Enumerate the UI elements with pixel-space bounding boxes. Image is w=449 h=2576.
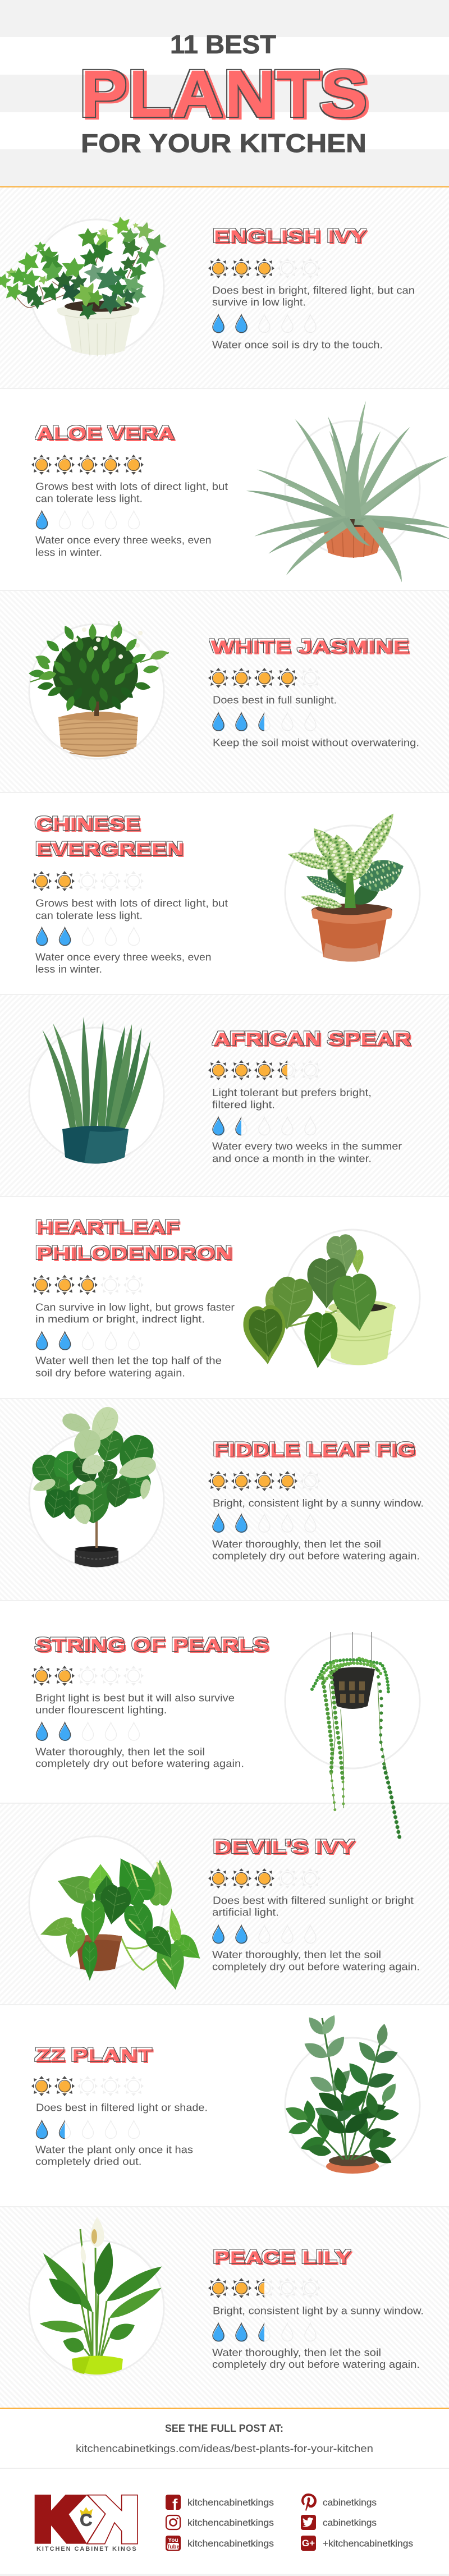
light text: Grows best with lots of direct light, but [35, 898, 228, 909]
panel: fiddle leaf fig [0, 1398, 449, 1600]
water text: Water once soil is dry to the touch. [212, 339, 383, 350]
water rating [213, 1925, 316, 1944]
plant circle [29, 2240, 164, 2375]
title: plants: PLANTS [79, 57, 367, 131]
orange divider [0, 186, 449, 187]
row background [0, 187, 449, 388]
icon: facebook: f [172, 2496, 178, 2513]
plant: white jasmine in wicker basket [29, 621, 169, 757]
water rating [213, 1117, 316, 1136]
footer [0, 2423, 449, 2576]
row background [0, 995, 449, 1196]
sun rating [208, 1868, 320, 1889]
light text line 2: in medium or bright, indrect light. [35, 1313, 205, 1324]
water rating [213, 1514, 316, 1533]
name: PEACE LILY [213, 2247, 350, 2267]
light text: Bright, consistent light by a sunny window. [213, 2305, 424, 2317]
water text: Water thoroughly, then let the soil [35, 1747, 205, 1758]
divider [0, 1803, 449, 1804]
plant circle [285, 421, 420, 556]
divider [0, 994, 449, 995]
divider [0, 590, 449, 591]
panel: zz plant [0, 2004, 449, 2174]
plant circle [29, 1836, 164, 1971]
icon: twitter [301, 2515, 316, 2530]
plant circle [285, 826, 420, 960]
sun rating [31, 1275, 144, 1295]
name: WHITE JASMINE [210, 636, 409, 656]
instagram handle: kitchencabinetkings [187, 2518, 274, 2528]
divider [0, 2206, 449, 2207]
water rating [213, 713, 316, 731]
name: FIDDLE LEAF FIG [213, 1439, 415, 1459]
plant circle [29, 1028, 164, 1162]
water rating [36, 927, 139, 946]
light text: Light tolerant but prefers bright, [212, 1087, 372, 1098]
panel: aloe vera [0, 388, 449, 583]
name line 1: CHINESE [35, 813, 140, 833]
water text: Water every two weeks in the summer [212, 1140, 402, 1152]
light text: Does best in filtered light or shade. [36, 2102, 208, 2114]
header stripes [0, 0, 449, 186]
plant: peace lily in lime bowl [38, 2217, 166, 2375]
plant circle [29, 624, 164, 759]
sun rating [208, 1471, 320, 1491]
panel: heartleaf philodendron [0, 1196, 449, 1378]
name [35, 813, 183, 859]
icon: youtube [166, 2536, 181, 2551]
plant: chinese evergreen in clay pot [286, 809, 409, 962]
name: ALOE VERA [35, 423, 174, 443]
light text line 2: can tolerate less light. [35, 910, 143, 922]
plant: african spear in teal pot [43, 1017, 150, 1164]
name line 2: PHILODENDRON [35, 1243, 232, 1263]
water text: Water once every three weeks, even [35, 952, 211, 963]
water text line 2: less in winter. [35, 964, 102, 975]
name: STRING OF PEARLS [35, 1634, 268, 1654]
logo: kitchen cabinet kings [35, 2495, 138, 2552]
icon: google plus: G+ [302, 2538, 315, 2549]
icon: google plus [301, 2536, 316, 2551]
name line 2: EVERGREEN [35, 838, 183, 859]
water text: Water well then let the top half of the [35, 1355, 222, 1366]
panel: peace lily [0, 2206, 449, 2408]
logo: kitchen cabinet kings: KITCHEN CABINET KINGS [36, 2546, 136, 2552]
title: 11 best: 11 BEST [170, 30, 276, 59]
bottom strip [0, 2574, 449, 2576]
water rating [36, 1332, 139, 1350]
water text line 2: completely dried out. [35, 2156, 141, 2167]
divider [0, 1600, 449, 1601]
plant circle [285, 1230, 420, 1364]
water text: Water once every three weeks, even [35, 534, 211, 546]
panel: english ivy [0, 187, 449, 388]
row background [0, 2207, 449, 2408]
water rating [36, 511, 139, 530]
sun rating [208, 2278, 320, 2298]
water text line 2: less in winter. [35, 547, 102, 558]
light text: Does best in bright, filtered light, but can [212, 285, 415, 296]
youtube handle: kitchencabinetkings [187, 2538, 274, 2549]
sun rating [31, 2076, 144, 2096]
divider [0, 2468, 449, 2469]
row background [0, 1399, 449, 1600]
water rating [213, 2323, 316, 2341]
facebook handle: kitchencabinetkings [187, 2497, 274, 2508]
plant circle [29, 1432, 164, 1567]
sun rating [31, 871, 144, 891]
divider [0, 1196, 449, 1197]
icon: youtube: Tube [167, 2544, 180, 2550]
panel: devil's ivy [0, 1803, 449, 2004]
divider [0, 388, 449, 389]
light text line 2: can tolerate less light. [35, 493, 143, 504]
name: DEVIL’S IVY [213, 1836, 355, 1857]
divider [0, 792, 449, 793]
water text line 2: soil dry before watering again. [35, 1367, 185, 1378]
plant: string of pearls in hanging basket [312, 1632, 400, 1838]
water text line 2: completely dry out before watering again. [35, 1758, 244, 1769]
water text: Water the plant only once it has [35, 2144, 193, 2155]
panel: african spear [0, 994, 449, 1196]
water text line 2: completely dry out before watering again. [212, 2359, 420, 2370]
divider [0, 1398, 449, 1399]
plant circle [29, 219, 164, 354]
water text line 2: completely dry out before watering again. [212, 1961, 420, 1972]
plant: aloe vera in terracotta pot [246, 400, 449, 583]
water text: Water thoroughly, then let the soil [212, 1539, 381, 1550]
pinterest handle: cabinetkings [323, 2497, 377, 2508]
light text line 2: under flourescent lighting. [35, 1704, 167, 1716]
url: kitchencabinetkings.com/ideas/best-plants-for-your-kitchen [76, 2443, 373, 2454]
light text: Bright light is best but it will also survive [35, 1693, 235, 1704]
panel: chinese evergreen [0, 792, 449, 975]
row background [0, 591, 449, 792]
row background [0, 1804, 449, 2004]
name [35, 1217, 232, 1263]
orange divider [0, 2408, 449, 2409]
light text line 2: survive in low light. [212, 296, 306, 308]
light text: Grows best with lots of direct light, but [35, 481, 228, 492]
plant: devil's ivy in brown pot [38, 1850, 207, 1992]
name: ZZ PLANT [35, 2045, 152, 2065]
panel: string of pearls [0, 1600, 449, 1838]
logo: kitchen cabinet kings: C [80, 2511, 92, 2530]
water rating [36, 1722, 139, 1741]
light text line 2: artificial light. [212, 1907, 279, 1918]
icon: pinterest [301, 2494, 317, 2511]
icon: facebook [166, 2495, 181, 2513]
light text: Can survive in low light, but grows faster [35, 1302, 235, 1313]
icon: youtube: You [168, 2537, 178, 2543]
name: ENGLISH IVY [213, 226, 366, 246]
divider [0, 2004, 449, 2005]
plant: english ivy in white pot [0, 215, 168, 356]
name line 1: HEARTLEAF [35, 1217, 179, 1237]
plant: fiddle leaf fig in black pot [28, 1403, 158, 1567]
panel: white jasmine [0, 590, 449, 792]
water text: Keep the soil moist without overwatering. [213, 737, 419, 749]
sun rating [31, 455, 144, 475]
light text: Does best with filtered sunlight or bright [213, 1895, 414, 1906]
header [0, 0, 449, 186]
plant circle [285, 2038, 420, 2172]
water rating [36, 2120, 139, 2139]
icon: instagram [166, 2515, 180, 2529]
sun rating [208, 258, 320, 278]
water text: Water thoroughly, then let the soil [212, 1949, 381, 1960]
plant: zz plant on saucer [283, 2013, 400, 2174]
plant: heartleaf philodendron in lime pot [242, 1232, 396, 1370]
twitter handle: cabinetkings [323, 2518, 377, 2528]
title: for your kitchen: FOR YOUR KITCHEN [81, 129, 366, 158]
water text: Water thoroughly, then let the soil [212, 2347, 381, 2358]
name: AFRICAN SPEAR [212, 1028, 410, 1048]
water rating [213, 314, 316, 333]
water text line 2: completely dry out before watering again. [212, 1550, 420, 1561]
light text line 2: filtered light. [212, 1099, 275, 1110]
light text: Does best in full sunlight. [213, 695, 337, 706]
sun rating [31, 1666, 144, 1686]
plant circle [285, 1634, 420, 1768]
google plus handle: +kitchencabinetkings [323, 2538, 413, 2549]
see the full post heading: SEE THE FULL POST AT: [165, 2423, 283, 2434]
sun rating [208, 668, 320, 688]
water text line 2: and once a month in the winter. [212, 1153, 372, 1164]
light text: Bright, consistent light by a sunny window. [213, 1497, 424, 1509]
sun rating [208, 1060, 320, 1080]
